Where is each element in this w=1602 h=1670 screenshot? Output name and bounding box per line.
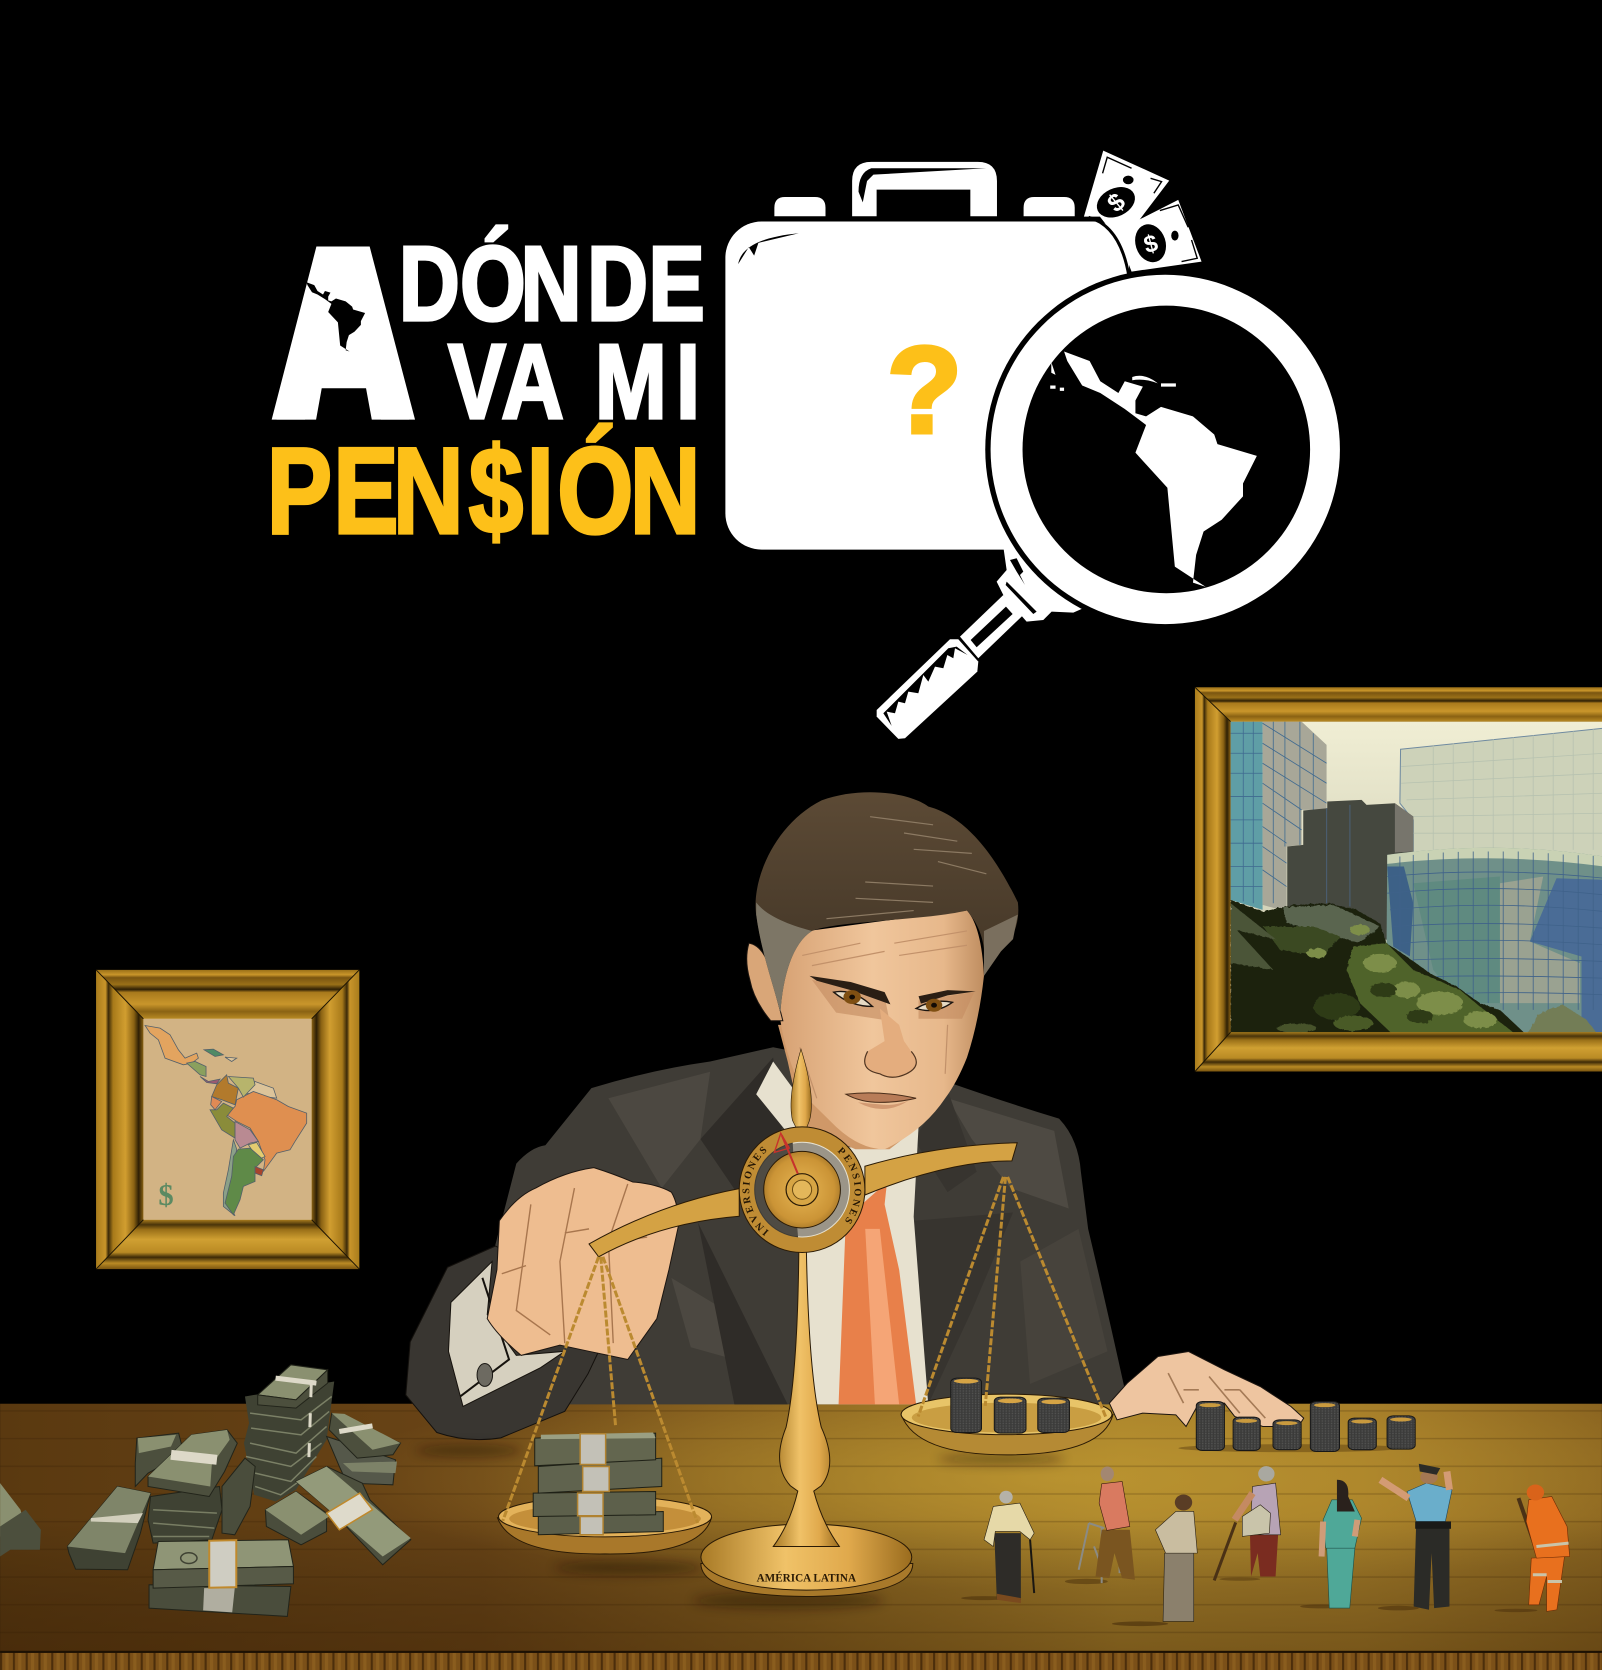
- partly visible stack at left edge: [0, 1483, 41, 1556]
- coins on desk: [1178, 1401, 1415, 1452]
- hand on desk: [1109, 1351, 1304, 1426]
- money on left pan: [533, 1432, 663, 1535]
- country shapes: [145, 1025, 307, 1216]
- left cuff: [448, 1262, 565, 1406]
- coins on right pan: [951, 1378, 1069, 1433]
- street sweeper: [1494, 1484, 1570, 1612]
- right pan: [901, 1394, 1113, 1455]
- brow and eye shadow: [812, 980, 974, 1021]
- sky: [1231, 722, 1602, 1033]
- base label: AMÉRICA LATINA: [757, 1573, 856, 1585]
- gold frame: [96, 970, 359, 1269]
- tilted left bundle: [67, 1486, 151, 1570]
- desk front edge: [0, 1653, 1602, 1670]
- word PEN$IÓN: PEN$IÓN: [267, 423, 700, 560]
- tall stack: [244, 1365, 334, 1501]
- round glass building: [1387, 848, 1602, 1032]
- map of Latin America: [1050, 351, 1257, 587]
- handle and grip: [877, 540, 1083, 739]
- trees: [1231, 900, 1598, 1035]
- case body: [725, 222, 1129, 550]
- word DÓNDE: DÓNDE: [399, 225, 705, 343]
- ear: [747, 943, 783, 1021]
- dial ring and centre: [738, 1126, 866, 1253]
- clasps: [774, 197, 1075, 216]
- left sleeve: [406, 1246, 618, 1440]
- finial: [791, 1049, 811, 1131]
- desk: [0, 1404, 1602, 1670]
- neck and face: [747, 911, 984, 1149]
- base: [701, 1524, 913, 1597]
- ring: [985, 269, 1345, 629]
- left tower: [1231, 722, 1327, 912]
- suit jacket: [492, 1047, 1124, 1404]
- hand holding beam: [487, 1168, 679, 1359]
- question mark: ?: [887, 321, 962, 459]
- beam: [589, 1143, 1017, 1257]
- police officer: [1378, 1464, 1452, 1610]
- man with walker: [1065, 1466, 1135, 1584]
- framed picture: city buildings: [1195, 687, 1602, 1071]
- gold frame: [1195, 687, 1602, 1071]
- dollar sign: $: [158, 1178, 174, 1212]
- left pan: [497, 1496, 712, 1554]
- bills: [1084, 151, 1202, 272]
- icon: briefcase with money: [725, 151, 1202, 550]
- right small stack: [327, 1413, 401, 1485]
- nose: [865, 1008, 916, 1077]
- dial ring and centre: PENSIONES: [838, 1146, 862, 1224]
- dial ring and centre: INVERSIONES: [742, 1146, 769, 1236]
- woman with cane and bag: [1214, 1466, 1281, 1581]
- man with cap: [1112, 1494, 1197, 1626]
- bill 2: $: [1141, 230, 1161, 259]
- pale building: [1400, 728, 1602, 870]
- words VA MI: VA MI: [448, 324, 700, 441]
- man in suit: [406, 792, 1124, 1440]
- framed picture: map of Latin America: [96, 970, 359, 1269]
- brows: [809, 976, 890, 1004]
- balance scale: [418, 1048, 1114, 1612]
- coins and right hand: [951, 1351, 1415, 1452]
- front bundles: [149, 1540, 293, 1616]
- handle: [852, 162, 997, 216]
- left middle stacks: [135, 1430, 255, 1543]
- title: A dónde va mi pensión: [267, 193, 705, 560]
- hair: [756, 792, 1018, 1013]
- necktie: [839, 1182, 916, 1404]
- map paper: [143, 1018, 313, 1220]
- old man with cane: [961, 1491, 1034, 1603]
- dark building: [1287, 800, 1413, 940]
- bill 1: $: [1102, 188, 1131, 218]
- group of small people: [961, 1464, 1570, 1626]
- stacks of money: [0, 1365, 411, 1616]
- face wrinkles: [800, 931, 967, 1098]
- crossed bundles: [265, 1466, 411, 1565]
- mouth: [846, 1093, 916, 1102]
- column: [773, 1246, 839, 1546]
- nurse: [1300, 1480, 1361, 1608]
- lens: [1023, 306, 1310, 593]
- large letter A with map: A: [272, 193, 414, 474]
- eyes: [834, 991, 872, 1006]
- shadows on desk: [415, 1444, 1065, 1609]
- chains: [503, 1177, 1106, 1523]
- icon: magnifying glass with Latin America: [877, 269, 1345, 739]
- shirt: [756, 1062, 928, 1404]
